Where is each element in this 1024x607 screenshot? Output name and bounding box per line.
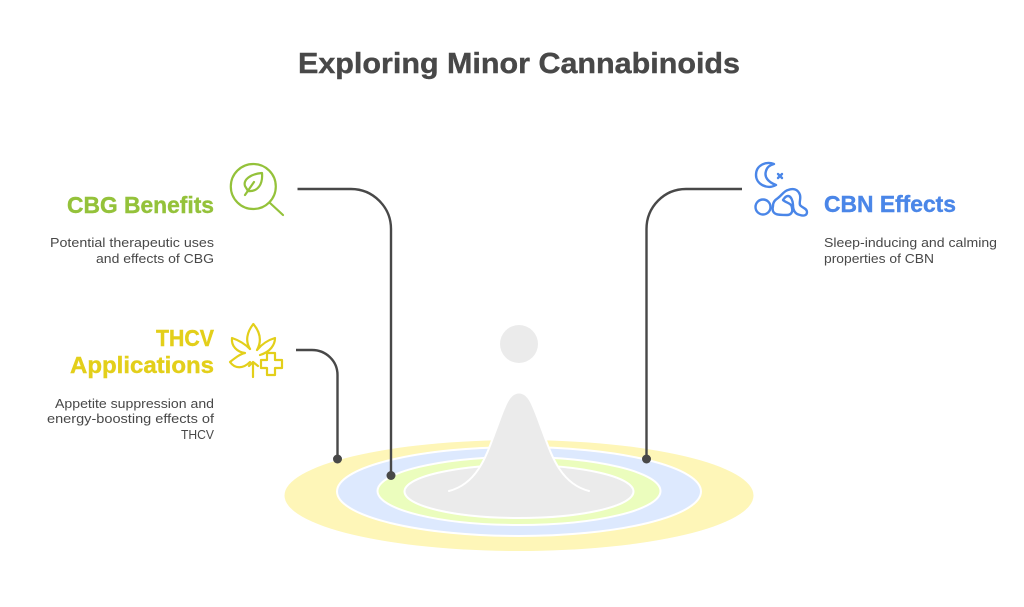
text: THCV description: THCV — [181, 427, 214, 442]
connector: CBG — [298, 189, 396, 480]
icon: cannabis leaf with plus — [230, 324, 282, 377]
text: CBN description: Sleep-inducing and calming — [824, 235, 997, 250]
text: CBG description — [50, 235, 215, 266]
text: THCV description — [47, 396, 214, 442]
figure head — [500, 325, 538, 363]
icon: moon and sleeping figure — [756, 163, 807, 216]
panel: THCV applications — [47, 324, 282, 442]
panel: CBN effects — [756, 163, 997, 266]
heading: THCV Applications — [70, 325, 215, 378]
heading: CBG Benefits: CBG Benefits — [67, 192, 214, 218]
ring: core grey — [404, 465, 634, 518]
ring: CBG green — [378, 457, 660, 525]
icon: magnifier with leaf — [231, 164, 283, 215]
text: CBG description: and effects of CBG — [96, 251, 214, 266]
text: THCV description: energy-boosting effects of — [47, 411, 214, 426]
text: CBG description: Potential therapeutic uses — [50, 235, 215, 250]
ring: THCV yellow — [284, 440, 754, 551]
text: CBN description: properties of CBN — [824, 251, 934, 266]
heading: CBN Effects: CBN Effects — [824, 191, 956, 217]
heading: THCV Applications: THCV — [156, 325, 215, 351]
heading: THCV Applications: Applications — [70, 352, 214, 378]
connector: CBN — [642, 189, 742, 464]
text: CBN description — [824, 235, 997, 266]
panel: CBG benefits — [50, 164, 283, 266]
figure body peak — [449, 392, 589, 491]
title: Exploring Minor Cannabinoids — [298, 48, 740, 80]
ring: CBN blue — [337, 447, 701, 536]
connector: THCV — [296, 350, 342, 464]
text: THCV description: Appetite suppression and — [55, 396, 214, 411]
diagram: concentric rings with central figure — [284, 325, 754, 551]
